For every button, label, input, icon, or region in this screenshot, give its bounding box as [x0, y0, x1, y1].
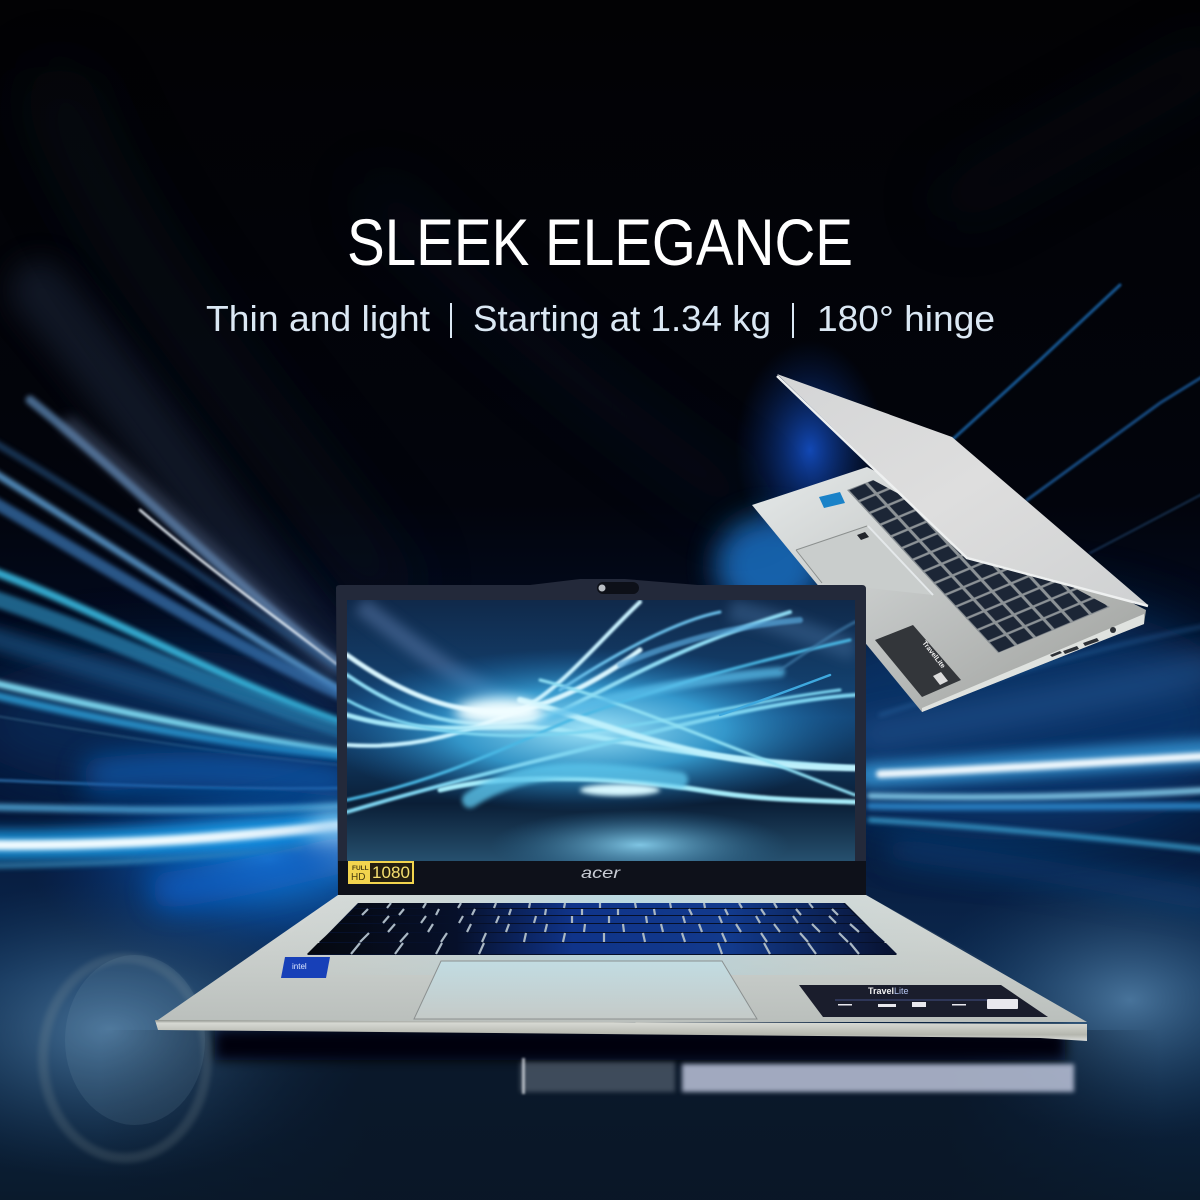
floor reflection — [100, 1030, 1160, 1200]
travellite sticker: TravelLite — [868, 986, 909, 996]
full hd 1080 badge: FULL — [352, 865, 369, 872]
full hd 1080 badge: 1080 — [372, 863, 410, 882]
fingerprint reader — [857, 532, 869, 540]
webcam shutter — [597, 582, 639, 594]
light streaks: right — [870, 625, 1200, 900]
main laptop — [155, 579, 1087, 1041]
light streaks: left — [0, 290, 359, 890]
lid bezel — [336, 579, 866, 895]
intel badge — [819, 492, 845, 508]
base deck — [155, 895, 1087, 1022]
keyboard — [847, 480, 1110, 653]
sticker: TravelLite — [920, 640, 946, 670]
laptop base — [752, 467, 1146, 712]
travellite sticker — [799, 985, 1048, 1017]
ports — [1050, 627, 1116, 657]
subtitle: Thin and light — [206, 298, 430, 339]
screen wallpaper — [347, 600, 855, 861]
touchpad — [414, 961, 757, 1019]
key gaps — [351, 903, 859, 954]
secondary laptop: half-closed side view — [752, 374, 1148, 712]
sticker — [875, 625, 961, 697]
title: SLEEK ELEGANCE — [347, 205, 853, 279]
subtitle — [206, 298, 995, 339]
touchpad — [796, 526, 933, 595]
full hd 1080 badge: HD — [351, 872, 365, 883]
front edge — [155, 1020, 1087, 1041]
intel badge — [281, 957, 330, 978]
key rows — [307, 903, 897, 954]
lens flare — [43, 955, 207, 1158]
intel badge: intel — [292, 962, 307, 971]
acer logo: acer — [581, 865, 621, 882]
subtitle: Starting at 1.34 kg — [473, 298, 771, 339]
full hd 1080 badge — [348, 861, 414, 884]
heading block — [206, 205, 995, 339]
fingerprint reader — [456, 963, 479, 974]
subtitle: 180° hinge — [817, 298, 995, 339]
keyboard — [307, 903, 897, 955]
lid — [777, 374, 1148, 605]
faint diagonal rays: upper right — [60, 60, 1200, 580]
